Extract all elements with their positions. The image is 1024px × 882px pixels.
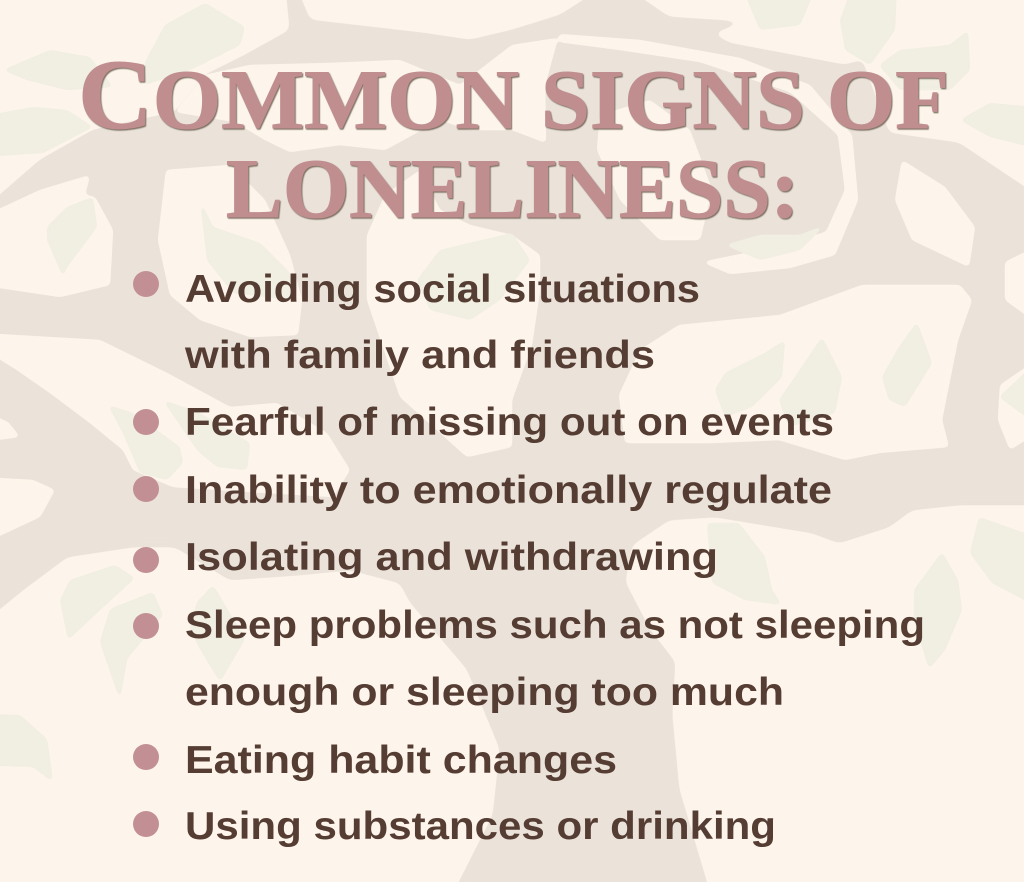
bullet 3 bbox=[133, 476, 159, 502]
item: fearful of missing out: Fearful of missing out on events bbox=[185, 401, 834, 444]
title: COMMON SIGNS OF bbox=[78, 39, 949, 150]
item continuation: with family and friends: with family and friends bbox=[184, 334, 655, 377]
item continuation: enough or too much: enough or sleeping too much bbox=[185, 671, 784, 714]
title bbox=[78, 39, 949, 236]
item: sleep problems: Sleep problems such as not sleeping bbox=[185, 604, 925, 647]
item: using substances: Using substances or drinking bbox=[185, 805, 776, 848]
item: isolating and withdrawing: Isolating and withdrawing bbox=[185, 536, 718, 579]
item: avoiding social situations: Avoiding social situations bbox=[185, 268, 700, 311]
cream gaps between branches bbox=[0, 34, 1024, 545]
item: eating habit changes: Eating habit changes bbox=[185, 739, 617, 782]
bullet 6 bbox=[133, 744, 159, 770]
bullet 4 bbox=[133, 547, 159, 573]
bullet 5 bbox=[133, 613, 159, 639]
title: LONELINESS: bbox=[226, 142, 799, 236]
bullet 7 bbox=[133, 811, 159, 837]
item: inability to regulate: Inability to emotionally regulate bbox=[185, 469, 832, 512]
bullet 2 bbox=[133, 409, 159, 435]
bullet 1 bbox=[133, 271, 159, 297]
